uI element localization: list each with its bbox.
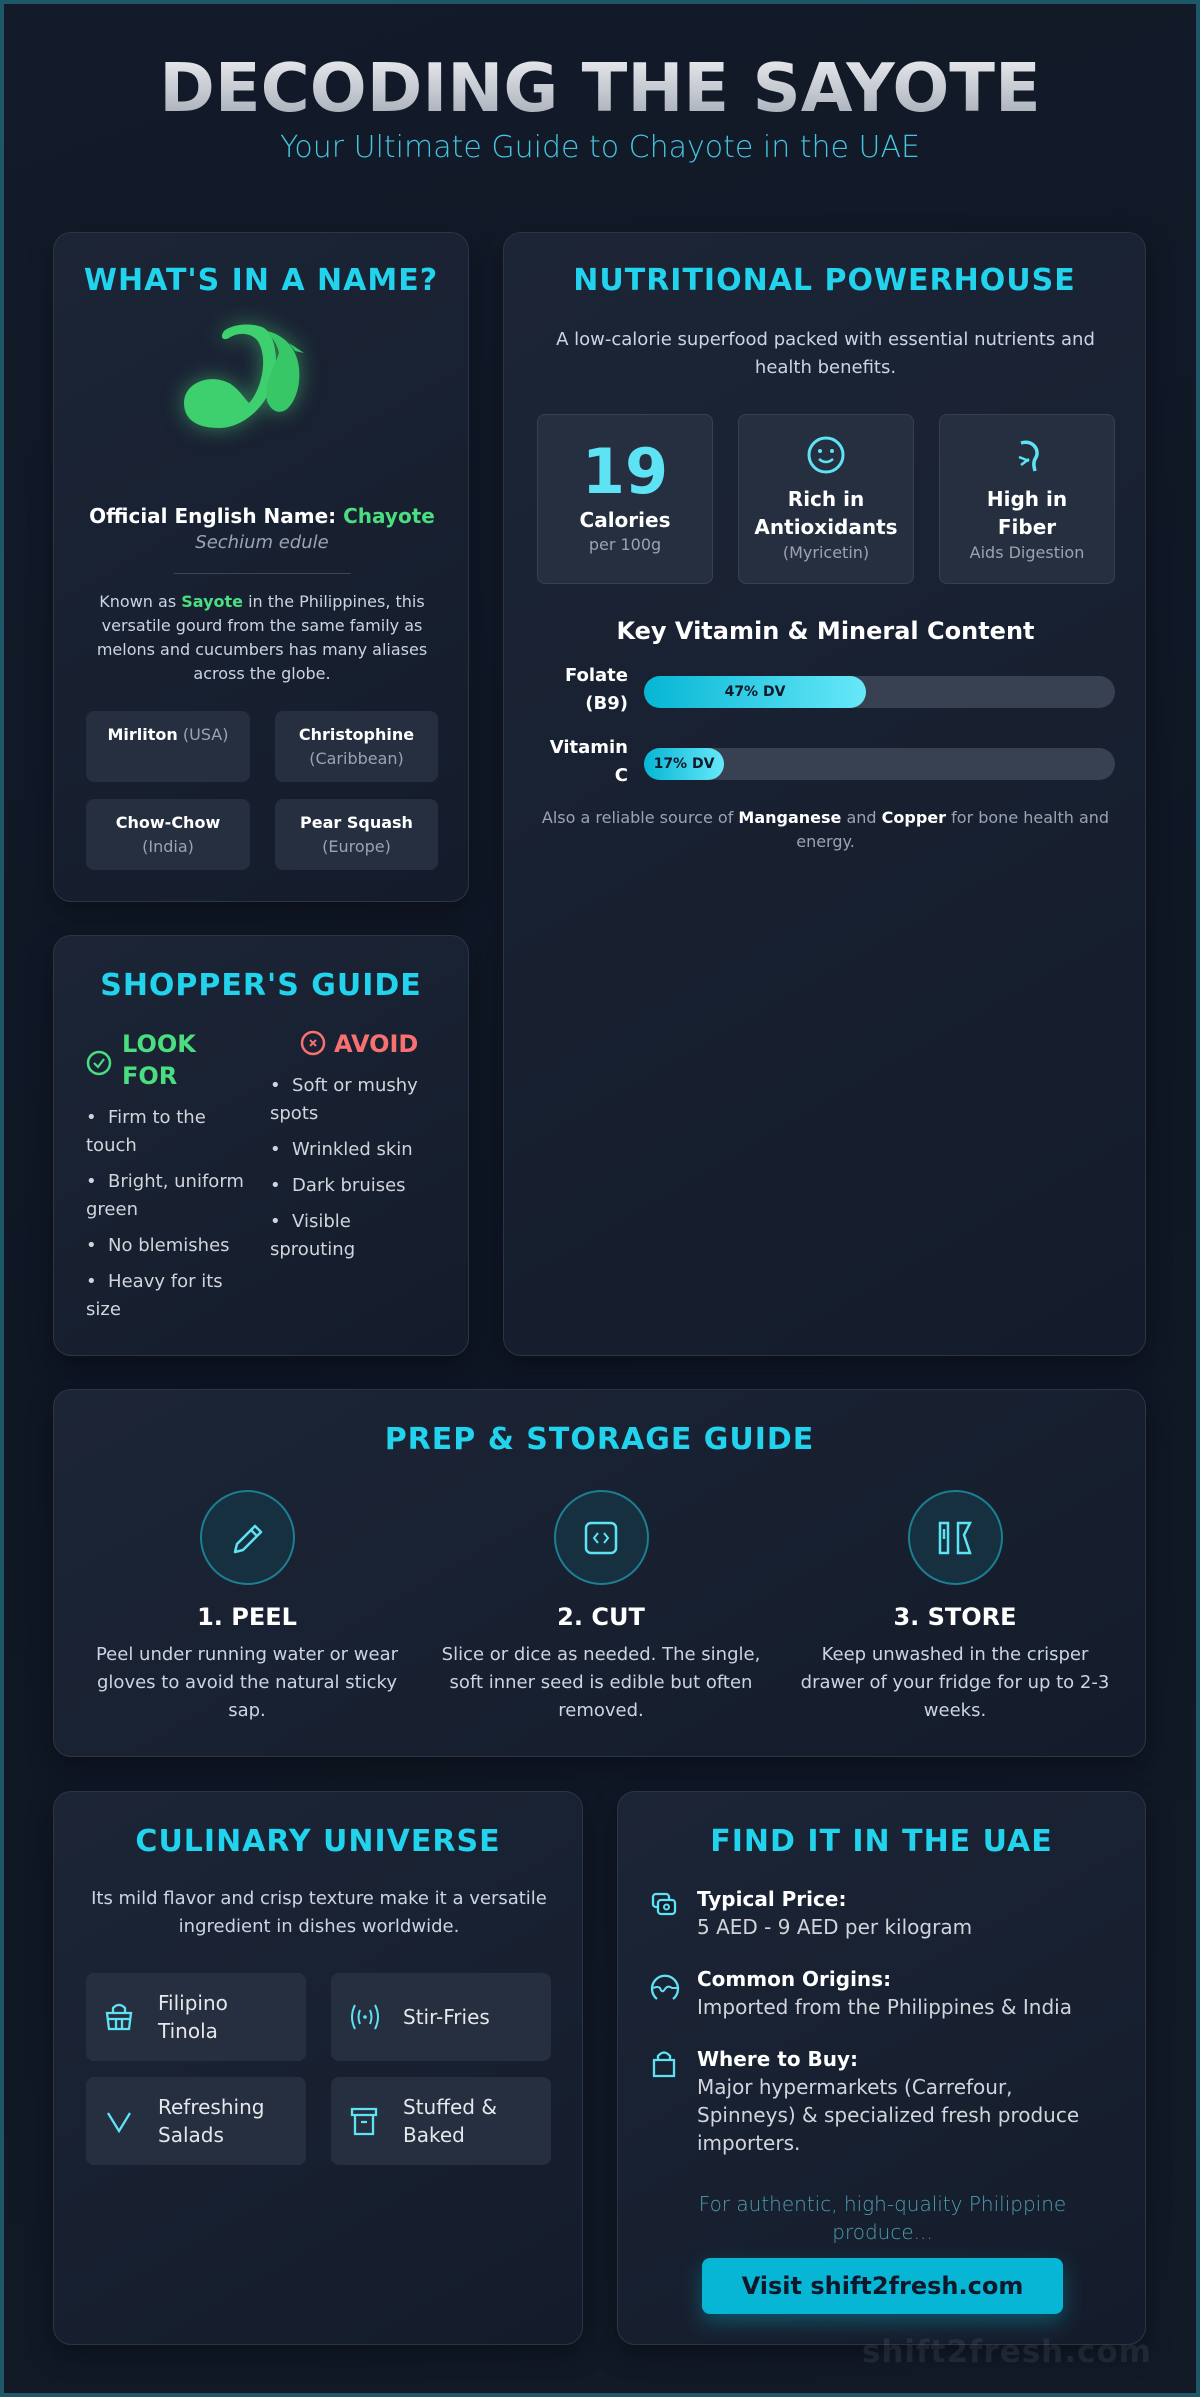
tile: salads: Refreshing [158,2095,264,2119]
column: avoid [270,1030,418,1260]
item: origins [650,1967,1072,2019]
heading: SHOPPER'S GUIDE [100,968,422,1003]
column: look for: • Firm to the touch [86,1107,206,1156]
column: look for: • Bright, uniform green [86,1171,244,1220]
alias: Christophine: (Caribbean) [309,749,404,768]
step: store [801,1490,1109,1721]
heading: NUTRITIONAL POWERHOUSE [573,263,1076,298]
scientific name: Sechium edule [195,532,329,553]
tile: tinola: Filipino [158,1991,228,2015]
tile: stuffed: Stuffed & [403,2095,497,2119]
panel: nutritional powerhouse [503,232,1146,1356]
bar chart: vitamin c [550,737,1115,786]
panel: culinary universe [53,1791,583,2345]
column: look for: • Heavy for its size [86,1271,223,1320]
icon: smiley [808,436,844,474]
panel: find it in the uae [617,1791,1146,2345]
note: Also a reliable source of Manganese and Copper for bone health and energy. [542,808,1109,851]
tile: stuffed: Baked [403,2123,465,2147]
icon: fridge [908,1490,1002,1585]
stat: fiber [939,414,1115,584]
column: avoid: • Dark bruises [270,1175,406,1196]
step: cut: 2. CUT [557,1603,645,1631]
icon: pencil [200,1490,294,1585]
alias: Pear Squash: (Europe) [322,837,391,856]
column: avoid: • Soft or mushy spots [270,1075,418,1124]
watermark: shift2fresh.com [862,2334,1152,2370]
stat: calories: 19 [582,435,668,508]
panel: prep & storage [53,1389,1146,1757]
bar chart: folate: Folate [565,665,628,686]
bar chart: vitamin c: 17% DV [654,756,714,772]
stat: calories: Calories [580,508,670,532]
alias: Chow-Chow: (India) [142,837,194,856]
stat: antioxidants: Antioxidants [754,515,898,539]
bar chart: vitamin c: C [615,765,628,786]
stat: antioxidants: Rich in [788,487,864,511]
heading: WHAT'S IN A NAME? [84,263,438,298]
description: A low-calorie superfood packed with essential nutrients and health benefits. [556,329,1095,378]
alias: Pear Squash [275,799,438,870]
alias: Chow-Chow: Chow-Chow [116,813,220,832]
icon: check [86,1050,112,1076]
step: peel [96,1490,398,1721]
stat: calories: per 100g [589,535,661,554]
alias: Christophine: Christophine [299,725,414,744]
item: where to buy: Major hypermarkets (Carrefour, Spinneys) & specialized fresh produce importers. [697,2075,1079,2155]
step: peel: Peel under running water or wear gloves to avoid the natural sticky sap. [96,1644,398,1721]
item: where to buy: Where to Buy: [697,2047,858,2071]
tile: stir-fries: Stir-Fries [403,2005,490,2029]
panel: what's in a name [53,232,469,902]
step: store: weeks. [924,1700,986,1721]
column: avoid: AVOID [334,1030,418,1058]
subtitle: Your Ultimate Guide to Chayote in the UAE [280,130,920,165]
alias: Mirliton: Mirliton (USA) [108,725,228,744]
step: cut: Slice or dice as needed. The single, soft inner seed is edible but often removed. [442,1644,760,1721]
item: price: 5 AED - 9 AED per kilogram [697,1915,972,1939]
step: store: drawer of your fridge for up to 2-3 [801,1672,1109,1693]
bar chart: folate: 47% DV [725,684,785,700]
column: avoid: • Visible sprouting [270,1211,355,1260]
column: look for: • No blemishes [86,1235,230,1256]
title: DECODING THE SAYOTE [159,49,1041,127]
step: cut [442,1490,760,1721]
cta text: For authentic, high-quality Philippine produce... [699,2192,1066,2244]
item: price [652,1887,972,1939]
tile: tinola: Tinola [158,2019,218,2043]
tile: stuffed [331,2077,551,2165]
icon: x [300,1030,326,1056]
icon: cut [554,1490,648,1585]
column: look for: FOR [122,1062,177,1090]
description: Its mild flavor and crisp texture make it a versatile ingredient in dishes worldwide. [91,1888,547,1937]
bar chart: folate [565,665,1115,714]
title [0,46,1200,130]
bar chart: vitamin c: Vitamin [550,737,628,758]
stat: calories [537,414,713,584]
alias: Mirliton [86,711,250,782]
step: peel: 1. PEEL [197,1603,297,1631]
alias: Chow-Chow [86,799,250,870]
subheading: Key Vitamin & Mineral Content [616,617,1035,645]
heading: FIND IT IN THE UAE [710,1824,1053,1859]
bar chart: folate: (B9) [585,693,628,714]
tile: stir-fries [331,1973,551,2061]
item: origins: Imported from the Philippines & India [697,1995,1072,2019]
item: price: Typical Price: [697,1887,846,1911]
column: avoid: • Wrinkled skin [270,1139,413,1160]
tile: salads [86,2077,306,2165]
button [702,2258,1063,2314]
heading: PREP & STORAGE GUIDE [385,1422,814,1457]
step: store: 3. STORE [893,1603,1017,1631]
icon: chayote leaf [173,313,312,440]
alias: Pear Squash: Pear Squash [300,813,413,832]
icon: fiber [1018,440,1039,472]
stat: antioxidants: (Myricetin) [783,543,869,562]
tile: salads: Salads [158,2123,224,2147]
description: Known as Sayote in the Philippines, this versatile gourd from the same family as melons and cucumbers has many aliases across the globe. [97,592,427,683]
column: look for [86,1030,244,1320]
stat: fiber: Aids Digestion [970,543,1084,562]
heading: CULINARY UNIVERSE [135,1824,501,1859]
button: Visit shift2fresh.com [742,2272,1023,2300]
stat: antioxidants [738,414,914,584]
alias: Christophine [275,711,438,782]
step: store: Keep unwashed in the crisper [822,1644,1088,1665]
tile: tinola [86,1973,306,2061]
item: where to buy [652,2047,1079,2155]
official name: Official English Name: Chayote [89,504,435,528]
stat: fiber: Fiber [998,515,1056,539]
stat: fiber: High in [987,487,1067,511]
column: look for: LOOK [122,1030,196,1058]
panel: shopper's guide [53,935,469,1356]
item: origins: Common Origins: [697,1967,891,1991]
